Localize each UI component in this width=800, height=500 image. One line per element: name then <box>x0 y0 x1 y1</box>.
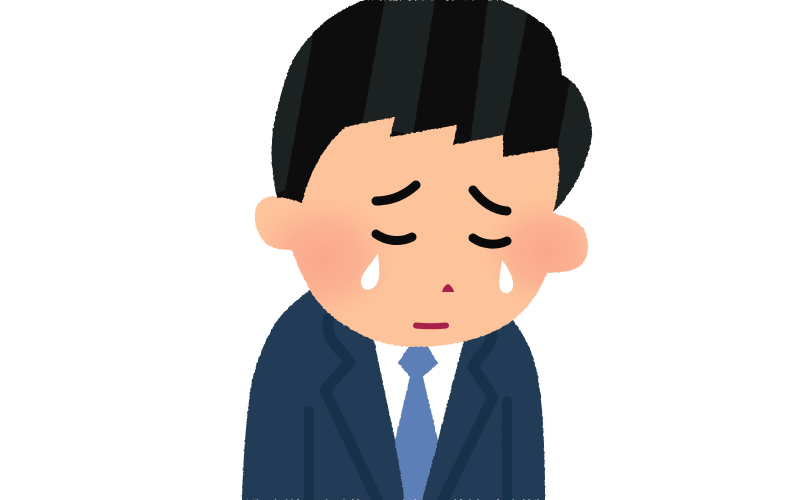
right lapel line <box>443 335 493 500</box>
illustration: crying businessman <box>242 0 592 500</box>
nose <box>442 284 454 292</box>
left pocket line <box>304 411 314 500</box>
right tear <box>499 260 513 293</box>
shirt <box>373 336 465 500</box>
left closed eye <box>376 234 412 241</box>
right eyebrow <box>473 190 507 211</box>
necktie <box>395 345 438 500</box>
hair <box>260 0 600 220</box>
left tear <box>361 253 379 290</box>
right pocket line <box>502 401 512 500</box>
hair highlight stripes <box>260 0 600 220</box>
face <box>250 117 607 347</box>
left eyebrow <box>376 185 416 201</box>
right closed eye <box>473 238 507 244</box>
left lapel line <box>325 318 377 500</box>
jacket <box>242 290 545 500</box>
mouth <box>416 322 446 329</box>
left blush <box>268 211 376 312</box>
right blush <box>498 206 588 294</box>
